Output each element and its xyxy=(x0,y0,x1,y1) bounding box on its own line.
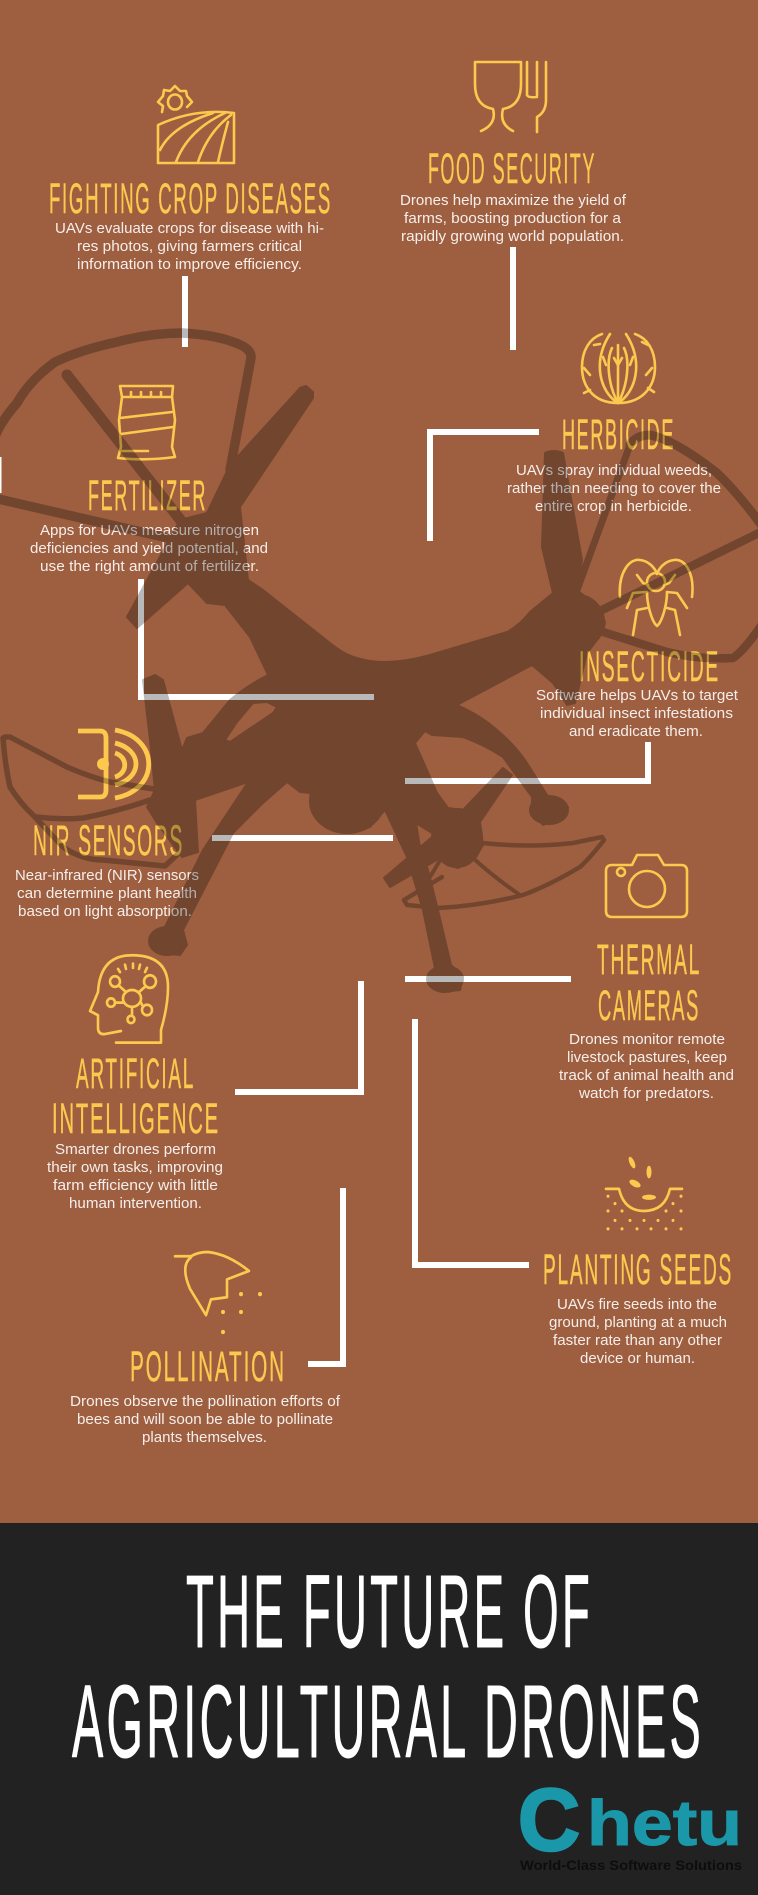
text block: can determine plant health xyxy=(17,885,197,902)
icon: sun over field xyxy=(158,86,234,163)
text block: rather than needing to cover the xyxy=(507,480,721,497)
connector line: insecticide xyxy=(405,742,648,781)
text block: deficiencies and yield potential, and xyxy=(30,540,268,557)
text block: track of animal health and xyxy=(559,1067,734,1084)
icon: wine glass and fork xyxy=(475,62,546,132)
icon: tumbleweed xyxy=(582,334,655,403)
connector line: fertilizer xyxy=(141,579,374,697)
icon: flower and pollen xyxy=(175,1252,262,1334)
lower-right hub and propeller xyxy=(384,768,512,887)
text block xyxy=(536,687,739,740)
text block: plants themselves. xyxy=(142,1429,267,1446)
text: NIR SENSORS xyxy=(33,817,184,865)
text block: Drones help maximize the yield of xyxy=(400,192,627,209)
text block: device or human. xyxy=(580,1350,695,1367)
text block: Software helps UAVs to target xyxy=(536,687,739,704)
text block: Near-infrared (NIR) sensors xyxy=(15,867,199,884)
text block: rapidly growing world population. xyxy=(401,228,624,245)
text block: Apps for UAVs measure nitrogen xyxy=(40,522,259,539)
connector line: pollination xyxy=(308,1188,343,1364)
landing feet xyxy=(149,927,185,955)
connector line: thermal cameras xyxy=(405,976,571,982)
text block: and eradicate them. xyxy=(569,723,703,740)
text block xyxy=(15,867,199,920)
text block: UAVs evaluate crops for disease with hi- xyxy=(55,220,324,237)
text block: human intervention. xyxy=(69,1195,202,1212)
text block xyxy=(549,1296,727,1367)
connector line: NIR sensors xyxy=(212,835,393,841)
text block xyxy=(507,462,721,515)
icon: camera xyxy=(606,855,687,917)
text block: farm efficiency with little xyxy=(53,1177,218,1194)
text block xyxy=(559,1031,734,1102)
text: FIGHTING CROP DISEASES xyxy=(49,175,332,223)
text block: Smarter drones perform xyxy=(55,1141,216,1158)
text block: their own tasks, improving xyxy=(47,1159,223,1176)
drone body, arms and legs xyxy=(127,386,605,992)
belly xyxy=(310,769,384,833)
connector line: herbicide xyxy=(430,432,539,541)
heading xyxy=(52,1050,220,1143)
icon: seeds in soil xyxy=(606,1156,682,1230)
logo: Chetu: C xyxy=(518,1770,580,1869)
text block: Drones monitor remote xyxy=(569,1031,725,1048)
hubs xyxy=(432,809,482,867)
text block: use the right amount of fertilizer. xyxy=(40,558,259,575)
panel: pollination: POLLINATION xyxy=(130,1343,286,1391)
bottom band xyxy=(0,1523,758,1895)
right rotor guard xyxy=(577,445,630,590)
top-left rotor guard xyxy=(0,333,251,470)
text block: ground, planting at a much xyxy=(549,1314,727,1331)
connector line: food security xyxy=(510,247,516,350)
logo: Chetu xyxy=(518,1770,742,1873)
panel: thermal cameras xyxy=(559,855,734,1102)
connector line: crop diseases xyxy=(182,276,188,347)
panel: planting seeds xyxy=(543,1156,733,1367)
left rotor guard xyxy=(5,737,160,790)
panel: pollination xyxy=(70,1252,341,1446)
icon: head with network xyxy=(90,955,168,1043)
heading: ARTIFICIAL xyxy=(76,1050,195,1098)
text block: livestock pastures, keep xyxy=(567,1049,727,1066)
text block: farms, boosting production for a xyxy=(404,210,622,227)
logo: Chetu: hetu xyxy=(587,1787,742,1859)
panel: NIR sensors xyxy=(15,730,199,920)
panel: artificial intelligence xyxy=(47,955,223,1212)
connector line: planting seeds xyxy=(415,1019,529,1265)
title xyxy=(72,1554,704,1779)
text block xyxy=(30,522,268,575)
icon: fertilizer bag xyxy=(118,386,175,459)
text block: based on light absorption. xyxy=(18,903,192,920)
text: INTELLIGENCE xyxy=(52,1095,220,1143)
lower-right rotor guard xyxy=(404,837,604,908)
text block xyxy=(55,220,324,273)
text block: UAVs spray individual weeds, xyxy=(516,462,712,479)
text block: information to improve efficiency. xyxy=(77,256,302,273)
text block: faster rate than any other xyxy=(553,1332,722,1349)
panel: food security xyxy=(400,62,627,245)
text block: entire crop in herbicide. xyxy=(535,498,692,515)
connector line: artificial intelligence xyxy=(235,981,361,1092)
logo: Chetu: World-Class Software Solutions xyxy=(520,1858,742,1873)
heading xyxy=(597,936,701,1030)
text block xyxy=(47,1141,223,1212)
text block: UAVs fire seeds into the xyxy=(557,1296,717,1313)
text block: individual insect infestations xyxy=(540,705,733,722)
panel: herbicide xyxy=(507,334,721,515)
icon: insect xyxy=(620,560,693,635)
text block: res photos, giving farmers critical xyxy=(77,238,302,255)
panel: fertilizer xyxy=(30,386,268,575)
text block: bees and will soon be able to pollinate xyxy=(77,1411,333,1428)
panel: fighting crop diseases xyxy=(49,86,332,273)
text block: watch for predators. xyxy=(578,1085,714,1102)
drone silhouette xyxy=(0,333,758,992)
text block xyxy=(70,1393,341,1446)
panel: insecticide xyxy=(536,560,739,740)
text block: Drones observe the pollination efforts of xyxy=(70,1393,341,1410)
text block xyxy=(400,192,627,245)
panel: fertilizer: FERTILIZER xyxy=(88,472,207,520)
icon: NIR sensor waves xyxy=(78,730,149,798)
